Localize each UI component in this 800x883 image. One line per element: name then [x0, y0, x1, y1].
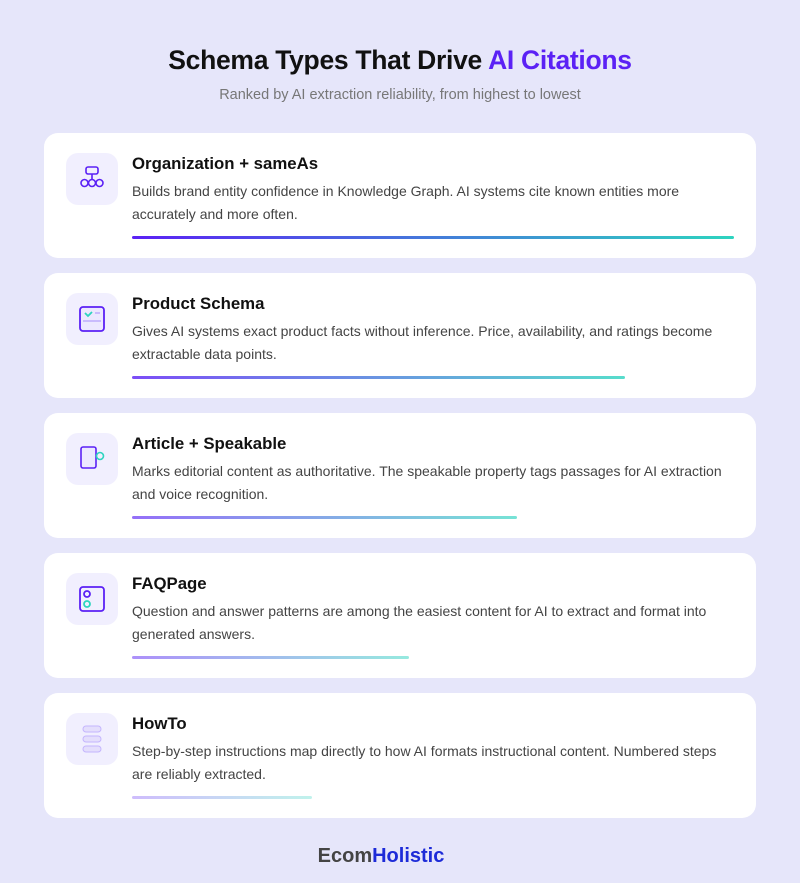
description: Question and answer patterns are among the easiest content for AI to extract and format into generated answers.	[132, 603, 706, 642]
icon: faq	[66, 573, 118, 625]
description: Step-by-step instructions map directly to how AI formats instructional content. Numbered steps are reliably extracted.	[132, 743, 716, 782]
footer logo: EcomHolistic	[318, 845, 444, 867]
bar	[132, 236, 734, 239]
description: Marks editorial content as authoritative. The speakable property tags passages for AI extraction and voice recognition.	[132, 463, 722, 502]
description: Gives AI systems exact product facts without inference. Price, availability, and ratings become extractable data points.	[132, 323, 712, 362]
title: Schema Types That Drive AI Citations	[168, 45, 632, 75]
bar	[132, 376, 625, 379]
heading: HowTo	[132, 714, 187, 733]
card: organization	[44, 133, 756, 258]
icon: howto	[66, 713, 118, 765]
card: product	[44, 273, 756, 398]
heading: Product Schema	[132, 294, 264, 313]
icon: product	[66, 293, 118, 345]
icon: article	[66, 433, 118, 485]
card: howto	[44, 693, 756, 818]
heading: Article + Speakable	[132, 434, 286, 453]
heading: Organization + sameAs	[132, 154, 318, 173]
bar	[132, 656, 409, 659]
description: Builds brand entity confidence in Knowledge Graph. AI systems cite known entities more accurately and more often.	[132, 183, 679, 222]
bar	[132, 516, 517, 519]
subtitle: Ranked by AI extraction reliability, from highest to lowest	[219, 87, 581, 103]
bar	[132, 796, 312, 799]
heading: FAQPage	[132, 574, 207, 593]
card: faq	[44, 553, 756, 678]
card: article	[44, 413, 756, 538]
icon: organization	[66, 153, 118, 205]
